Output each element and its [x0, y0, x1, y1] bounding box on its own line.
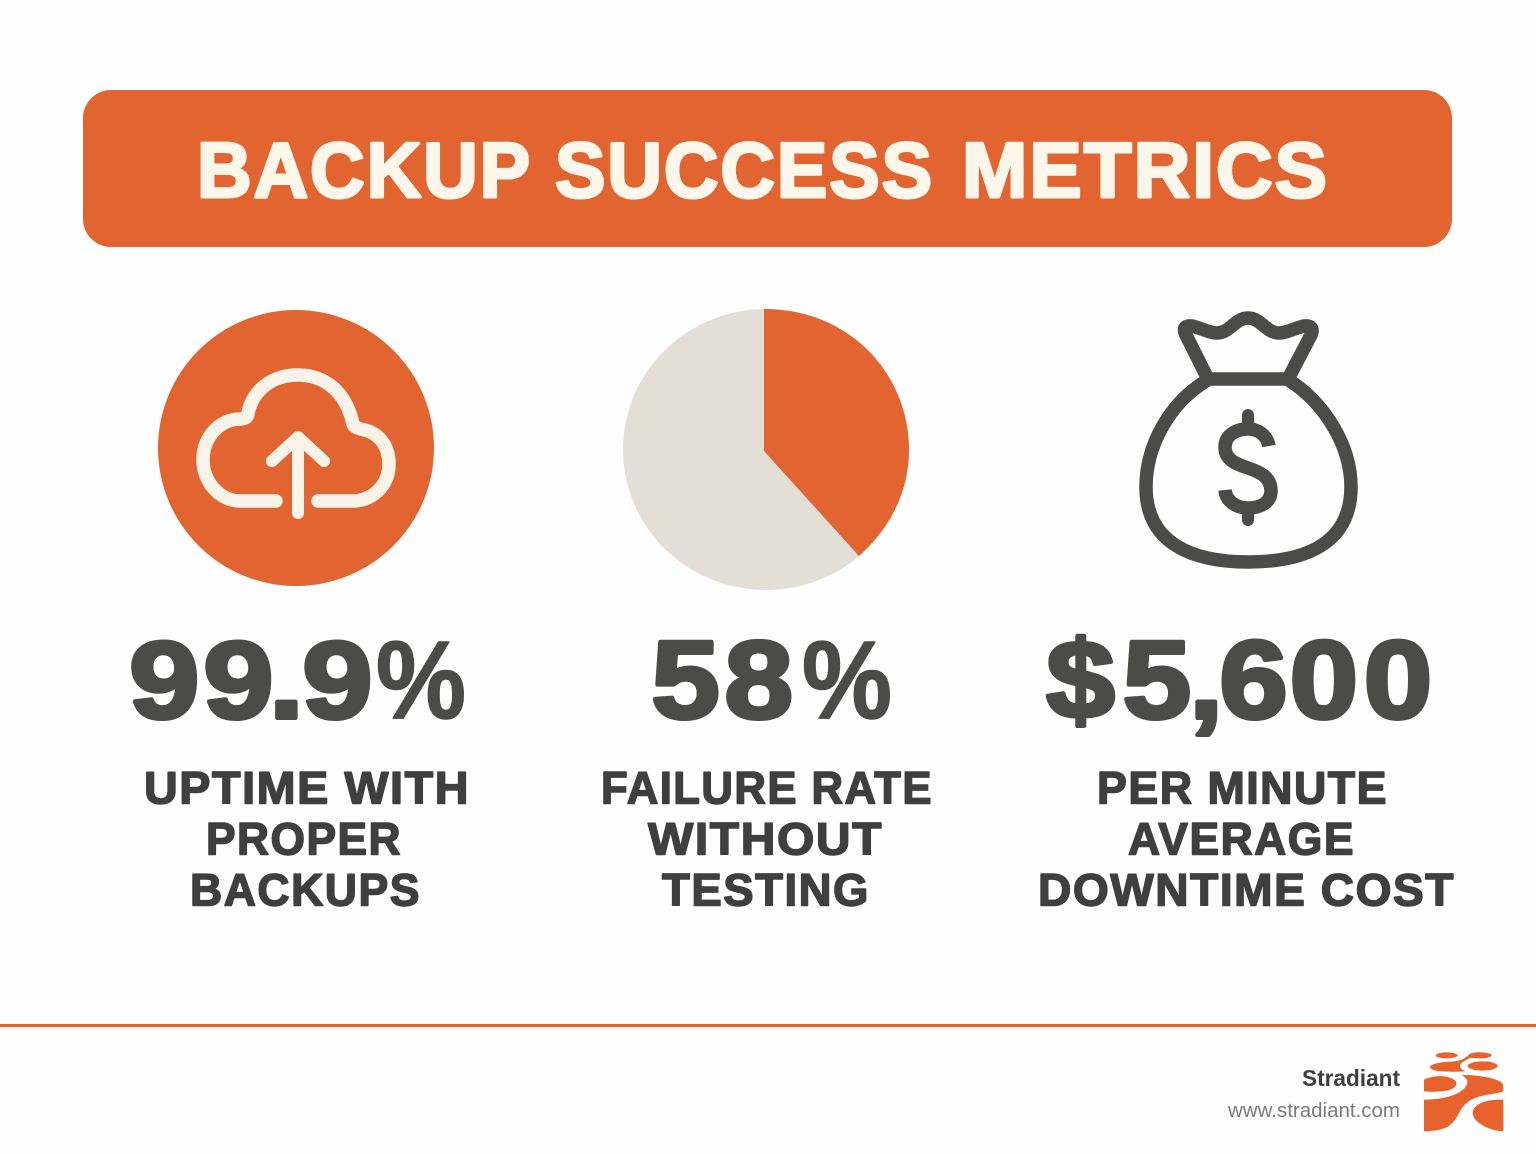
label: uptime with proper backups: BACKUPS	[190, 864, 421, 916]
stat: 58%	[651, 618, 892, 742]
label: per minute average downtime cost: DOWNTIME COST	[1038, 864, 1455, 916]
label: uptime with proper backups: UPTIME WITH	[144, 762, 470, 814]
title: METRICS	[962, 126, 1329, 214]
label: failure rate without testing: TESTING	[662, 864, 870, 916]
panel: failure rate	[601, 309, 933, 916]
stat: 58%: 58	[651, 618, 793, 742]
label: failure rate without testing	[601, 762, 933, 916]
pie chart	[623, 309, 909, 590]
stat: 99.9%: %	[376, 619, 466, 742]
footer brand	[1227, 1052, 1503, 1131]
title banner	[83, 90, 1452, 247]
icon: stradiant logo	[1424, 1052, 1503, 1131]
title: SUCCESS	[555, 126, 934, 214]
stat: $5,600: $5,600	[1046, 618, 1432, 742]
panel: downtime cost	[1038, 318, 1455, 916]
icon: money bag	[1146, 318, 1351, 562]
stat: 99.9%: 99.9	[129, 620, 373, 742]
panel: uptime	[129, 310, 470, 916]
brand name: Stradiant	[1302, 1065, 1400, 1091]
brand url: www.stradiant.com	[1227, 1100, 1400, 1122]
title	[197, 126, 1329, 214]
label: per minute average downtime cost: PER MINUTE	[1097, 762, 1388, 814]
label: failure rate without testing: WITHOUT	[648, 814, 883, 864]
label: per minute average downtime cost	[1038, 762, 1455, 916]
label: per minute average downtime cost: AVERAGE	[1128, 814, 1355, 864]
title: BACKUP	[197, 126, 532, 214]
stat: 58%: %	[802, 619, 892, 742]
label: uptime with proper backups: PROPER	[206, 814, 402, 864]
label: uptime with proper backups	[144, 762, 470, 916]
icon: cloud upload	[158, 310, 434, 586]
label: failure rate without testing: FAILURE RATE	[601, 762, 933, 814]
